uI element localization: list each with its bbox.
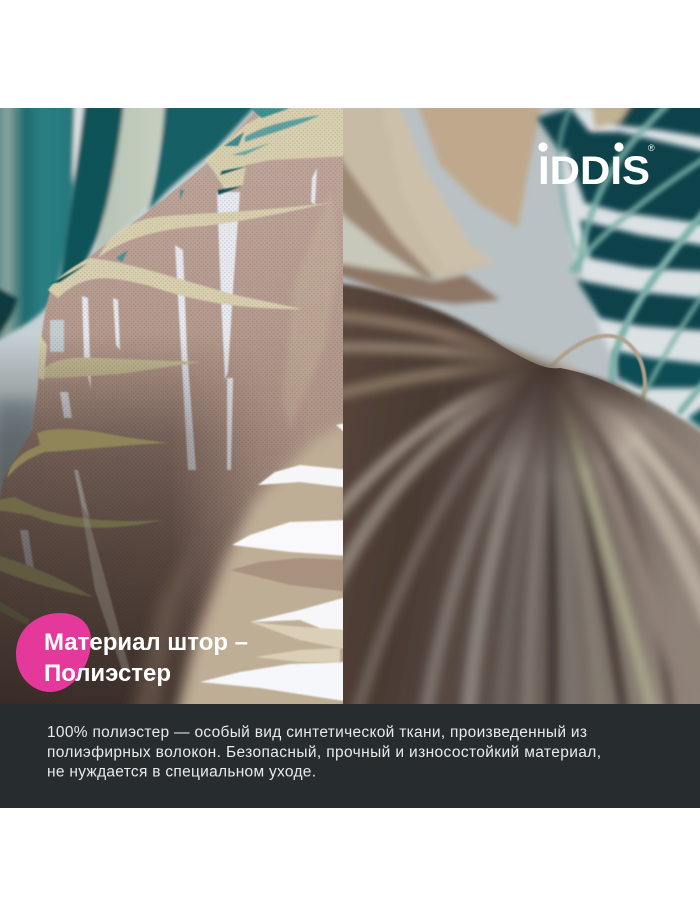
description text: не нуждается в специальном уходе. — [47, 764, 316, 780]
tan stem loop — [550, 336, 645, 400]
tan leaves at top — [343, 108, 544, 308]
soft pale veil on the right of the frond — [284, 208, 337, 421]
woven texture over the frond — [4, 108, 343, 582]
mauve palm frond body — [0, 100, 350, 710]
dark convergence of the ribs — [456, 333, 644, 466]
white and beige frond tips — [200, 422, 350, 702]
heading: material name — [44, 629, 248, 687]
description text: полиэфирных волокон. Безопасный, прочный и износостойкий материал, — [47, 744, 601, 761]
pale teal curved veins — [559, 100, 700, 412]
photo panel: printed curtain fabric close-up — [0, 90, 350, 720]
dark shading toward the lower left — [0, 343, 284, 704]
dark teal monstera leaf with white stripes — [537, 90, 700, 440]
lower blue-grey shadowed background — [0, 394, 36, 496]
pink circle accent — [16, 613, 91, 692]
soft beige base of the lower right fronds — [130, 420, 350, 720]
large brown fan palm with radiating ribs — [330, 282, 700, 720]
dark description band — [0, 704, 700, 808]
heading: material name: Полиэстер — [44, 660, 171, 687]
teal leaves at top left — [0, 108, 256, 342]
photo panel: blurred palm leaves background — [330, 90, 700, 720]
white gaps between fronds — [20, 168, 317, 570]
pale fronds across the fabric — [38, 100, 350, 380]
teal accents seen through the fronds — [50, 108, 320, 284]
logo: IDDIS brand mark: IDDIS — [538, 149, 650, 193]
description text: 100% полиэстер — особый вид синтетической ткани, произведенный из — [47, 724, 587, 741]
logo: IDDIS brand mark: ® — [648, 143, 655, 153]
description text — [47, 724, 601, 780]
white stripes behind the teal leaf — [560, 108, 700, 420]
olive fronds in the shadow — [0, 429, 167, 670]
heading: material name: Материал штор – — [44, 629, 248, 656]
